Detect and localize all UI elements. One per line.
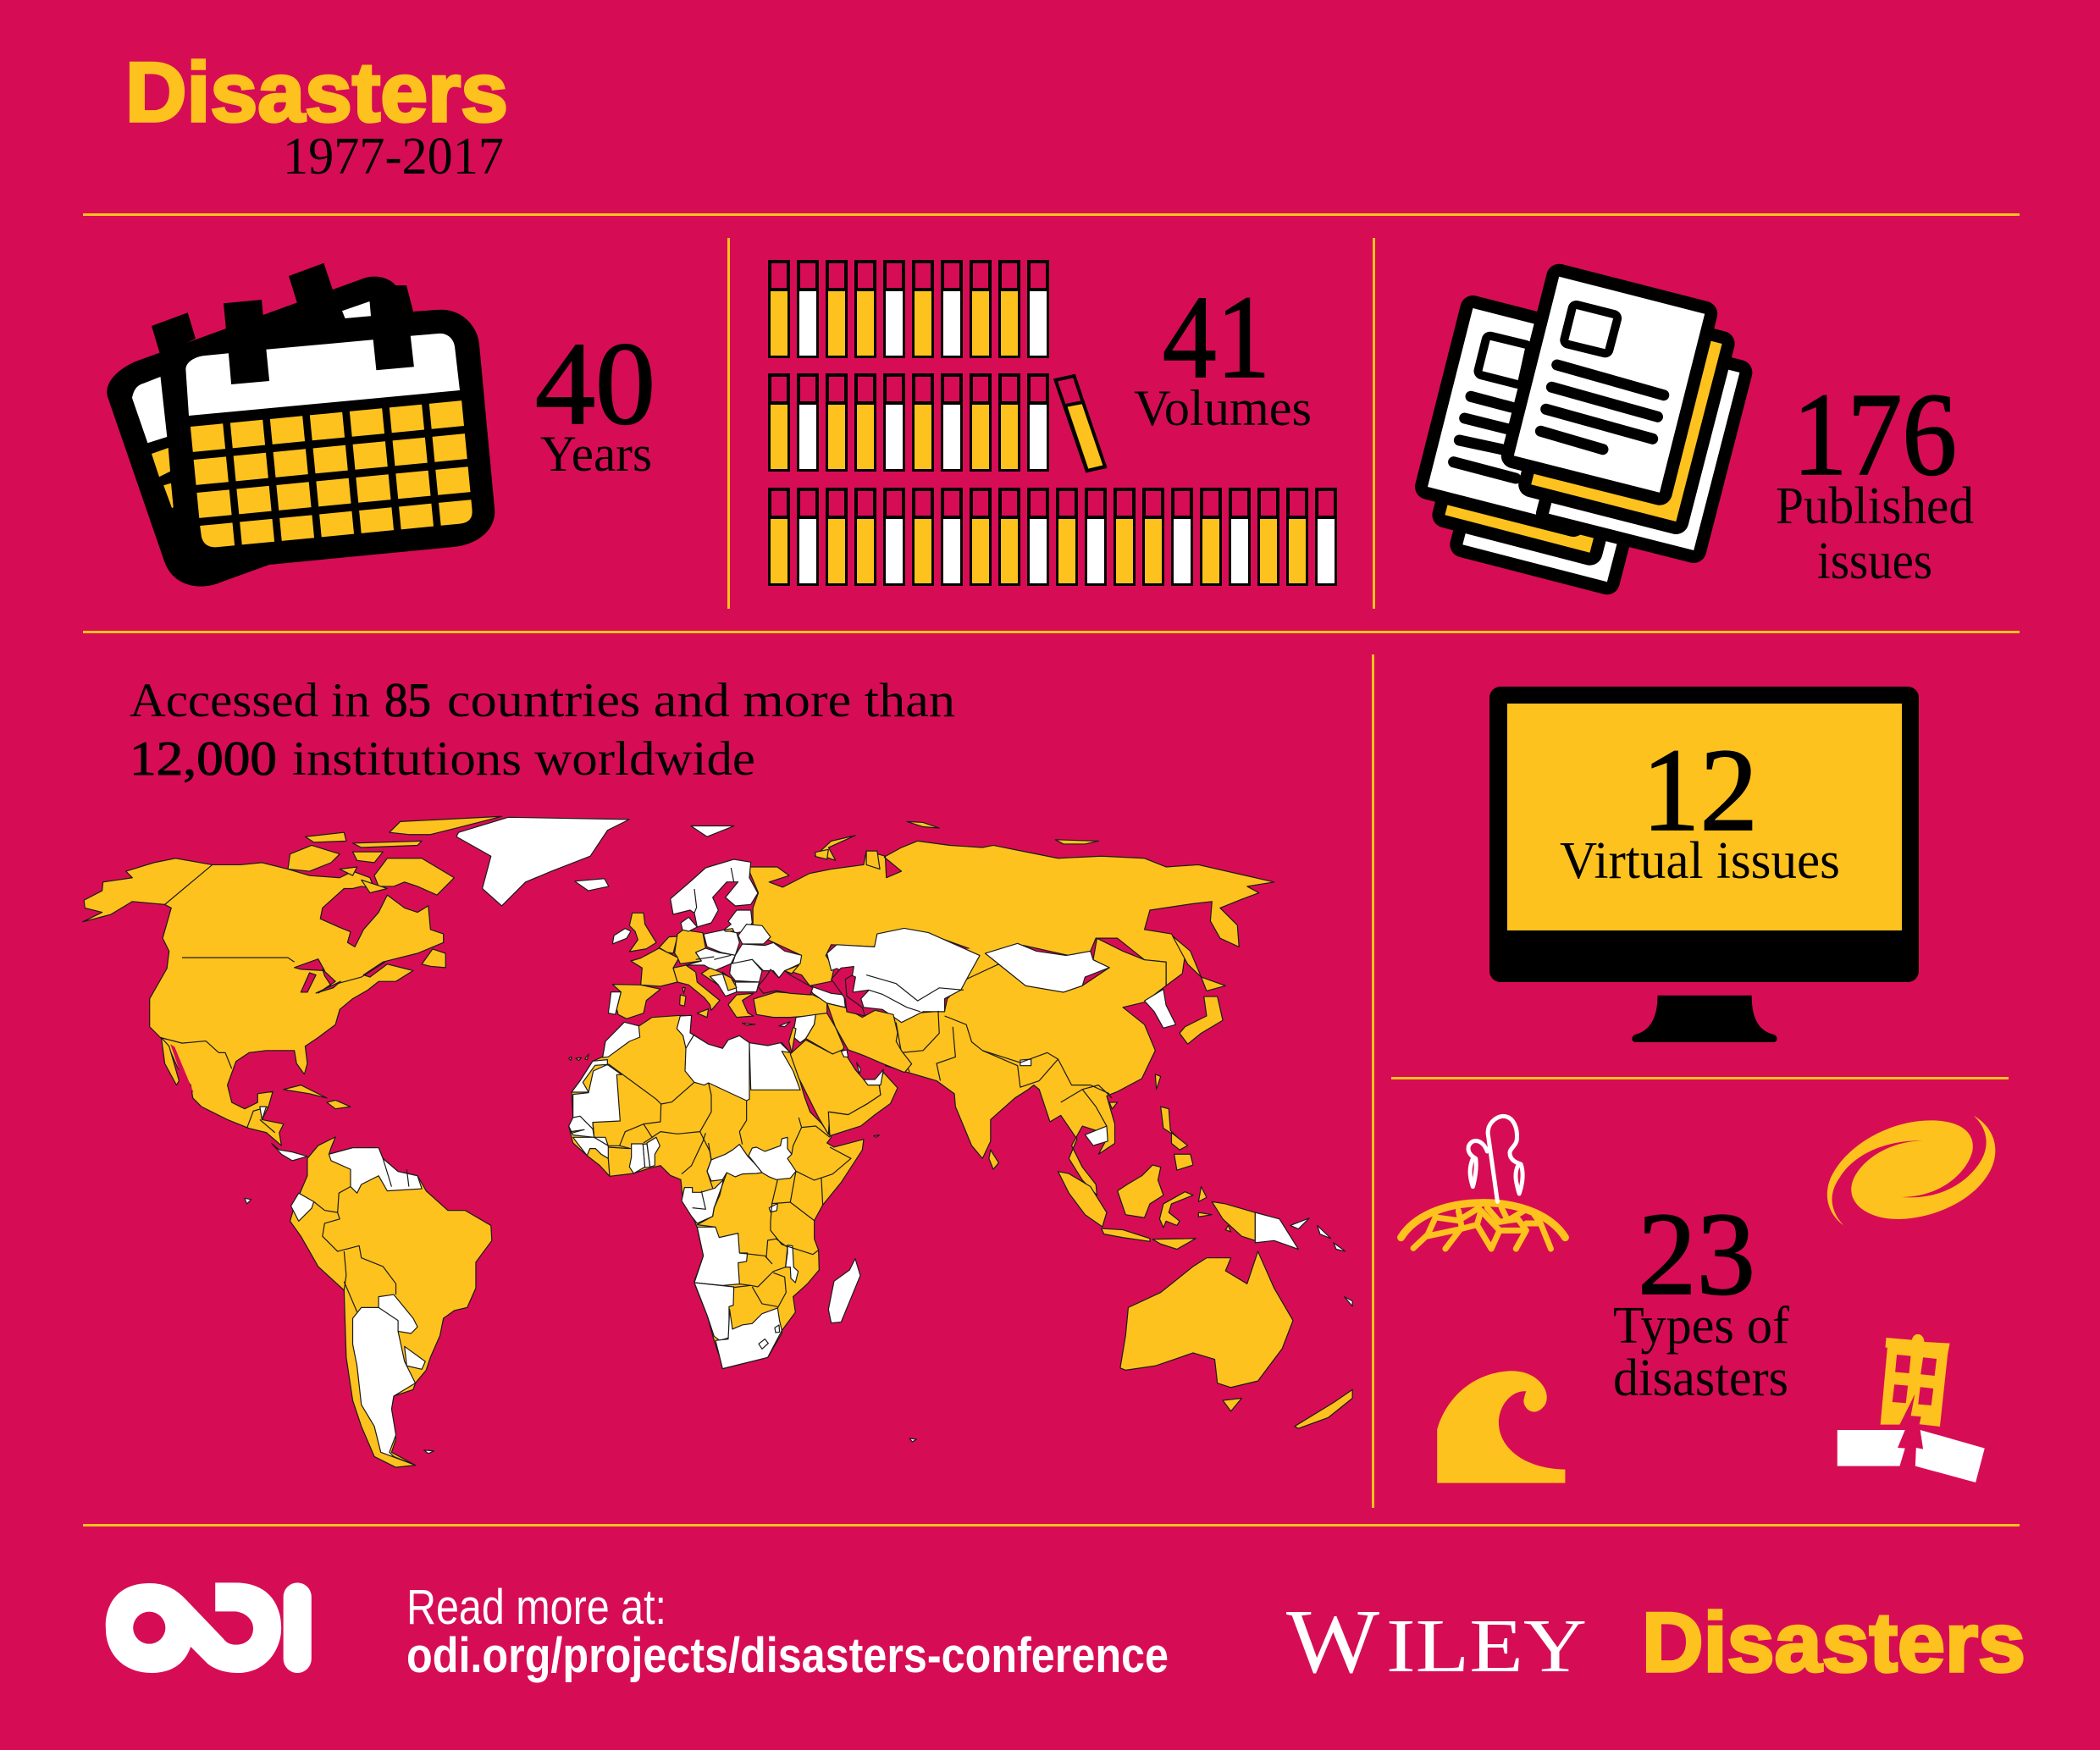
icon: calendar (107, 263, 495, 587)
leaning book (1055, 376, 1105, 471)
icon: computer monitor (1489, 687, 1919, 1042)
logo: Disasters journal: Disasters (1642, 1595, 2025, 1689)
icon: bookshelf of volumes (770, 262, 1335, 584)
stat: 41 volumes (1134, 272, 1312, 436)
stat: 23 types of disasters: 23 (1638, 1189, 1755, 1320)
heading: reach of the journal: countries and more than (447, 674, 955, 727)
text: read more link: odi.org/projects/disasters-conference (406, 1628, 1169, 1683)
subtitle: years: 1977-2017 (283, 128, 504, 185)
map: Europe and Middle East (608, 849, 912, 1136)
stat: 12 virtual issues: 12 (1642, 725, 1758, 856)
icon: tsunami wave (1437, 1371, 1565, 1483)
logo: ODI (106, 1582, 312, 1673)
heading: reach of the journal: 85 (384, 674, 431, 727)
logo: Wiley: W (1286, 1592, 1379, 1692)
icon: volcano (1401, 1116, 1565, 1249)
text: read more link (406, 1580, 1169, 1683)
heading: reach of the journal: 12,000 (130, 732, 277, 786)
stat: 40 years: 40 (535, 318, 655, 450)
icon: stack of journal issues (1428, 277, 1739, 582)
stat: 176 published issues: 176 (1793, 369, 1957, 500)
stat: 41 volumes: 41 (1163, 272, 1270, 403)
text: read more link: Read more at: (406, 1580, 666, 1635)
map: Asia and Oceania (575, 821, 1352, 1442)
title: Disasters (125, 45, 508, 139)
shelf row 1 (770, 262, 1047, 356)
stat: 23 types of disasters: Types of (1613, 1297, 1789, 1355)
logo: Wiley: ILEY (1386, 1604, 1587, 1688)
stat: 41 volumes: Volumes (1134, 380, 1312, 436)
stat: 40 years: Years (540, 426, 652, 482)
icon: cyclone (1827, 1116, 1995, 1225)
logo: Wiley (1286, 1592, 1587, 1692)
stat: 176 published issues: issues (1817, 533, 1932, 590)
heading: reach of the journal: Accessed in (130, 674, 370, 727)
heading: reach of the journal (130, 674, 955, 786)
icon: earthquake building (1838, 1334, 1985, 1482)
stat: 176 published issues: Published (1776, 478, 1974, 535)
shelf row 2 (770, 375, 1047, 470)
map: Africa (569, 1015, 879, 1369)
heading: reach of the journal: institutions worldwide (292, 732, 755, 786)
stat: 176 published issues (1776, 369, 1974, 590)
stat: 23 types of disasters (1613, 1189, 1789, 1407)
map: Americas and Greenland (83, 816, 629, 1467)
shelf row 3 (770, 489, 1335, 584)
stat: 12 virtual issues (1560, 725, 1840, 890)
stat: 23 types of disasters: disasters (1613, 1350, 1788, 1407)
world map (83, 816, 1352, 1467)
stat: 12 virtual issues: Virtual issues (1560, 832, 1840, 890)
